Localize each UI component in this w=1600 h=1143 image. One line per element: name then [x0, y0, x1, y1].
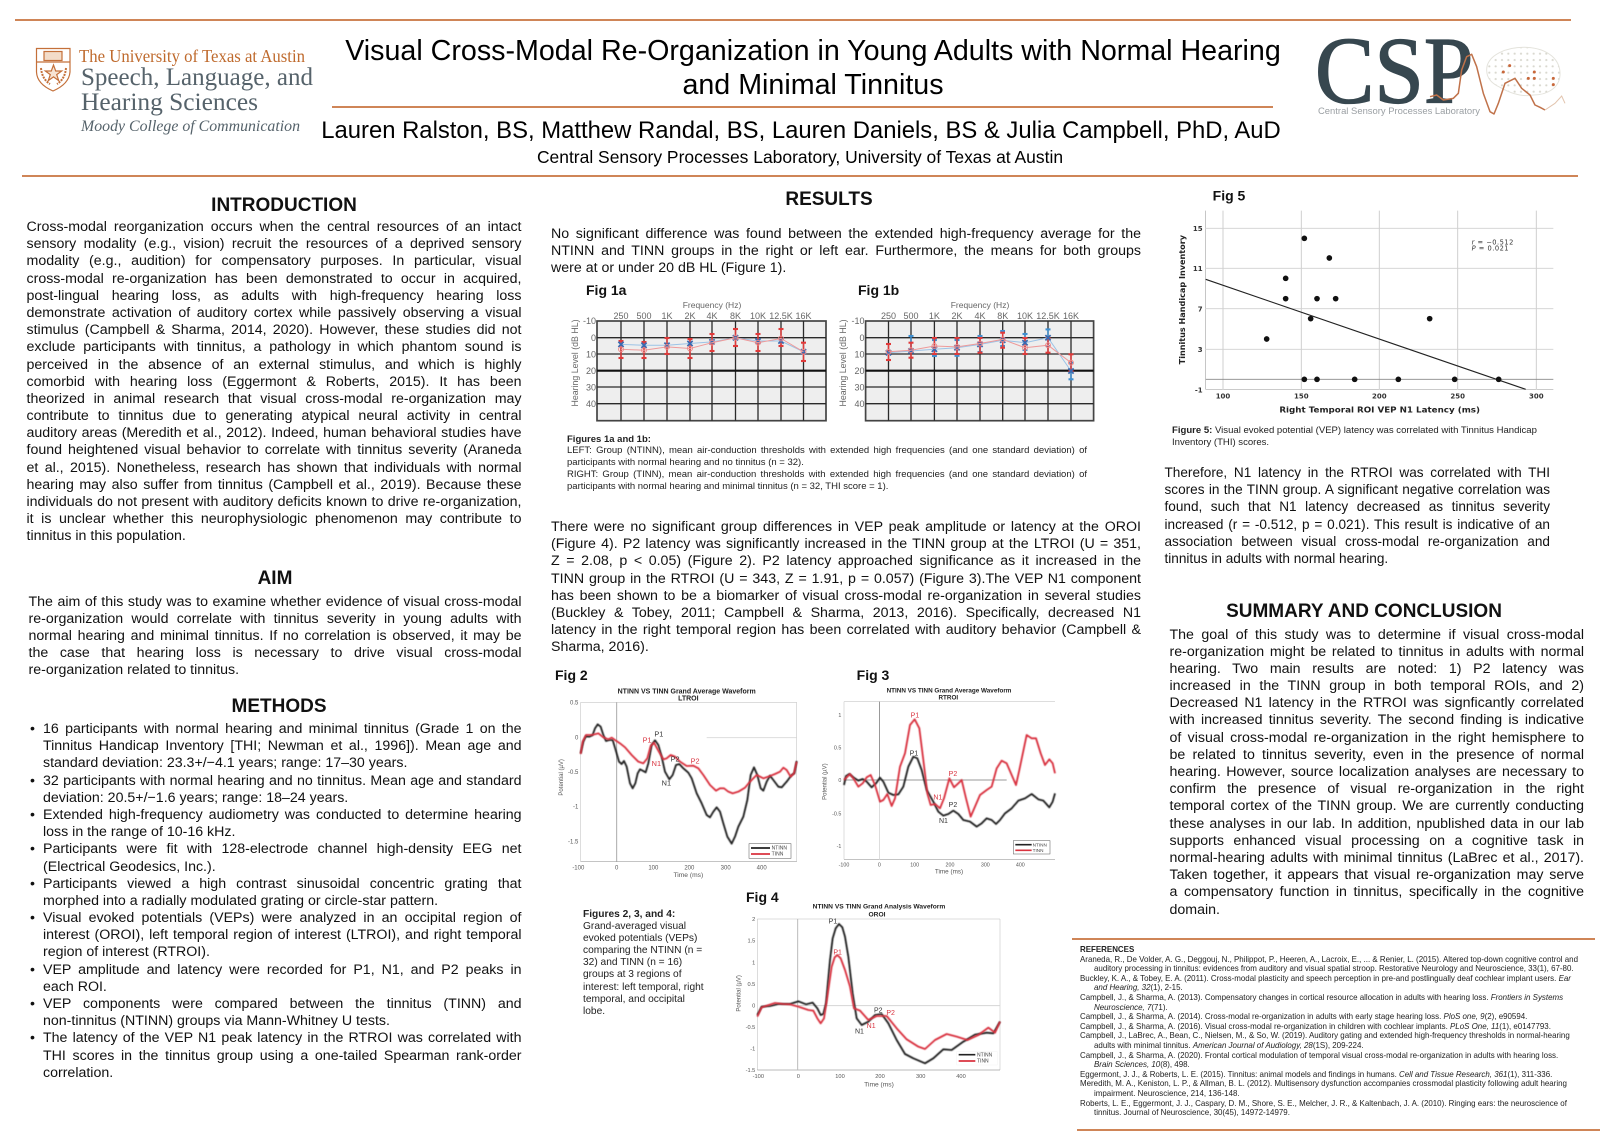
caption: figures 2, 3, and 4: Figures 2, 3, and 4:: [583, 909, 675, 920]
text block: introduction: hearing may also suffer from tinnitus (Campbell et al., 2019). Because these: [26, 477, 522, 493]
chart: Fig 2 LTROI waveform: LTROI: [678, 696, 699, 703]
chart: Fig 3 RTROI waveform: 0: [838, 778, 841, 784]
list: methods: standard deviation: 23.3+/−4.1 years; range: 17–30 years.: [43, 755, 407, 771]
chart: Fig 3 RTROI waveform: Fig 3: [857, 667, 890, 683]
chart: Fig 4 OROI waveform: 1.5: [747, 939, 755, 945]
chart: Fig 5 scatter plot: Fig 5: [1213, 188, 1246, 204]
text: •: [30, 773, 35, 789]
chart: Fig 2 LTROI waveform: Potential (µV): [559, 759, 565, 796]
text block: summary and conclusion: temporal cortex of the TINN group. We are currently conducting: [1170, 798, 1584, 814]
chart: Fig 2 LTROI waveform: TINN: [772, 852, 784, 858]
caption: figures 2, 3, and 4: interest: left temporal, right: [583, 982, 704, 993]
text block: introduction: theorized in animal research that visual cross-modal re-organization may: [26, 391, 522, 407]
chart: Fig 2 LTROI waveform: Fig 2: [555, 667, 588, 683]
caption: figures 1a and 1b: participants with normal hearing and minimal tinnitus (n = 32, THI score = 1).: [567, 481, 888, 492]
references: Campbell, J., & Sharma, A. (2020). Frontal cortical modulation of temporal visual cross-modal re-organization in adults with hearing loss.: [1080, 1051, 1558, 1060]
text block: aim: the case that hearing loss is necessary to drive visual cross-modal: [28, 645, 522, 661]
references: REFERENCES: [1080, 945, 1134, 954]
text block: introduction: stimulus (Campbell & Sharma, 2014, 2020). However, these studies did not: [26, 322, 522, 338]
caption: figures 1a and 1b: Figures 1a and 1b:: [567, 434, 651, 444]
text block: results latency: has been shown to be a biomarker of visual cross-modal re-organization in several studies: [551, 588, 1141, 604]
caption: figures 2, 3, and 4: lobe.: [583, 1006, 605, 1017]
text block: aim: re-organization related to tinnitus.: [28, 662, 239, 678]
caption: figures 2, 3, and 4: 32) and TINN (n = 16): [583, 957, 682, 968]
references bottom rule: [1077, 1129, 1600, 1131]
text block: summary and conclusion: these analyses in our lab. In addition, npublished data in our lab: [1170, 816, 1584, 832]
list: methods: each ROI.: [43, 979, 107, 995]
chart: Fig 3 RTROI waveform: [822, 667, 1056, 876]
chart: Fig 1a audiogram: 30: [586, 382, 596, 392]
list: methods: interest (OROI), left temporal region of interest (LTROI), and right temporal: [43, 927, 522, 943]
list: methods: 32 participants with normal hearing and no tinnitus. Mean age and standard: [43, 773, 522, 789]
chart: Fig 1b audiogram: 10: [854, 350, 864, 360]
chart: Fig 2 LTROI waveform: 0: [575, 735, 579, 741]
chart: Fig 3 RTROI waveform: P1: [911, 712, 919, 719]
text block: summary and conclusion: increased in the TINN group in both temporal ROIs, and 2): [1170, 678, 1584, 694]
chart: Fig 3 RTROI waveform: P2: [949, 771, 957, 778]
references: Meredith, M. A., Keniston, L. P., & Allman, B. L. (2012). Multisensory dysfunction accompanies crossmodal plasticity following adult hearing: [1080, 1079, 1567, 1088]
caption: figures 1a and 1b: RIGHT: Group (TINN), mean air-conduction thresholds with extended high frequencies (and one standard deviation) of: [567, 469, 1087, 480]
list: methods: non-tinnitus (NTINN) groups via Mann-Whitney U tests.: [43, 1013, 390, 1029]
chart: Fig 4 OROI waveform: NTINN VS TINN Grand Analysis Waveform: [813, 904, 945, 911]
heading: aim: AIM: [258, 568, 292, 589]
chart: Fig 4 OROI waveform: 0: [797, 1074, 800, 1080]
text block: correlation result: association between visual cross-modal re-organization and: [1164, 534, 1550, 549]
chart: Fig 4 OROI waveform: N1: [855, 1028, 864, 1035]
chart: Fig 4 OROI waveform: 0.5: [747, 982, 755, 988]
chart: Fig 1a audiogram: 16K: [795, 311, 812, 321]
chart: Fig 1a audiogram: Hearing Level (dB HL): [570, 319, 580, 407]
chart: Fig 1b audiogram: 40: [854, 399, 864, 409]
list: methods: Participants were fit with 128-electrode channel high-density EEG net: [43, 841, 522, 857]
chart: Fig 3 RTROI waveform: 1: [838, 713, 841, 719]
text block: results latency: TINN group in the RTROI (U = 343, Z = 1.91, p = 0.057) (Figure 3).The VEP N1 component: [551, 571, 1141, 587]
text block: summary and conclusion: with increased tinnitus severity. The second finding is indicative: [1170, 712, 1584, 728]
text block: correlation result: found, such that N1 latency decreased as tinnitus severity: [1164, 499, 1550, 514]
chart: Fig 4 OROI waveform: 400: [956, 1074, 966, 1080]
chart: Fig 3 RTROI waveform: Time (ms): [935, 869, 963, 876]
references: Brain Sciences, 10(8), 498.: [1094, 1060, 1190, 1069]
text block: summary and conclusion: re-organization might be related to tinnitus in adults with normal: [1170, 644, 1584, 660]
list: methods: THI scores in the tinnitus group using a one-tailed Spearman rank-order: [43, 1048, 522, 1064]
text block: correlation result: Therefore, N1 latency in the RTROI was correlated with THI: [1164, 465, 1550, 480]
references: adults with minimal tinnitus. American Journal of Audiology, 28(1S), 209-224.: [1094, 1041, 1364, 1050]
logo: University of Texas at Austin: [36, 46, 313, 135]
references: tinnitus. Journal of Neuroscience, 30(45), 14972-14979.: [1094, 1108, 1290, 1117]
list: methods: 16 participants with normal hearing and minimal tinnitus (Grade 1 on the: [43, 721, 522, 737]
references: Eggermont, J. J., & Roberts, L. E. (2015). Tinnitus: animal models and findings in humans. Cell and Tissue Research, 361(1), 311-336.: [1080, 1070, 1552, 1079]
chart: Fig 3 RTROI waveform: P2: [949, 802, 957, 809]
caption: figure 5: Figure 5: Visual evoked potential (VEP) latency was correlated with Tinnitus Handicap: [1172, 425, 1537, 436]
chart: Fig 5 scatter plot: 11: [1193, 265, 1203, 273]
text block: introduction: demonstrate activation of auditory cortex while passively observing a visual: [26, 305, 522, 321]
chart: Fig 4 OROI waveform: 100: [835, 1074, 845, 1080]
text block: summary and conclusion: hearing. Two main results are noted: 1) P2 latency was: [1170, 661, 1584, 677]
chart: Fig 1a audiogram: 40: [586, 399, 596, 409]
chart: Fig 5 scatter plot: 15: [1193, 225, 1203, 233]
header bottom rule: [22, 175, 1578, 177]
chart: Fig 5 scatter plot: 250: [1450, 392, 1465, 400]
list: methods: Tinnitus Handicap Inventory [THI; Newman et al., 1996]). Mean age and: [43, 738, 522, 754]
text: •: [30, 841, 35, 857]
text block: results latency: Sharma, 2016).: [551, 639, 649, 655]
chart: Fig 2 LTROI waveform: NTINN VS TINN Grand Average Waveform: [618, 688, 756, 695]
chart: Fig 2 LTROI waveform: -100: [572, 865, 585, 871]
chart: Fig 1a audiogram: 10: [586, 350, 596, 360]
references: Araneda, R., De Volder, A. G., Deggouj, N., Philippot, P., Heeren, A., Lacroix, E., ... & Renier, L. (2015). Altered top-down cognitive control and: [1080, 955, 1578, 964]
list: methods: Visual evoked potentials (VEPs) were analyzed in an occipital region of: [43, 910, 522, 926]
references: impairment. Neuroscience, 214, 136-148.: [1094, 1089, 1240, 1098]
caption: figure 5: Inventory (THI) scores.: [1172, 437, 1269, 448]
chart: Fig 2 LTROI waveform: 0.5: [570, 700, 579, 706]
text block: results latency: (Figure 4). P2 latency was significantly increased in the TINN group at the LTROI (U = 351,: [551, 536, 1141, 552]
chart: Fig 4 OROI waveform: -100: [753, 1074, 764, 1080]
text block: introduction: perceived in the absence of an external stimulus, and which is highly: [26, 356, 522, 372]
text: •: [30, 876, 35, 892]
chart: Fig 4 OROI waveform: Fig 4: [746, 889, 779, 905]
chart: Fig 2 LTROI waveform: -0.5: [568, 770, 579, 776]
chart: Fig 3 RTROI waveform: -100: [839, 863, 849, 869]
chart: Fig 1b audiogram: 1K: [929, 311, 940, 321]
caption: figures 2, 3, and 4: evoked potentials (VEPs): [583, 933, 697, 944]
chart: Fig 4 OROI waveform: -1.5: [746, 1068, 755, 1074]
text block: summary and conclusion: Decreased N1 latency in the RTROI was signficantly correlated: [1170, 695, 1584, 711]
text block: aim: normal hearing and minimal tinnitus. If no correlation is observed, it may be: [28, 628, 522, 644]
text block: summary and conclusion: domain.: [1170, 902, 1220, 918]
list: methods: (Electrical Geodesics, Inc.).: [43, 858, 216, 874]
affiliation: Central Sensory Processes Laboratory, University of Texas at Austin: [537, 147, 1063, 167]
chart: Fig 5 scatter plot: Right Temporal ROI VEP N1 Latency (ms): [1279, 405, 1480, 415]
caption: figures 2, 3, and 4: temporal, and occipital: [583, 994, 685, 1005]
text block: summary and conclusion: [1170, 626, 1584, 918]
text: •: [30, 962, 35, 978]
chart: Fig 3 RTROI waveform: TINN: [1033, 848, 1044, 853]
references: [1080, 945, 1578, 1117]
chart: Fig 2 LTROI waveform: -1.5: [568, 840, 579, 846]
chart: Fig 2 LTROI waveform: N1: [652, 759, 661, 768]
references: Campbell, J., & Sharma, A. (2014). Cross-modal re-organization in adults with early stage hearing loss. PloS one, 9(2), e90594.: [1080, 1012, 1527, 1021]
chart: Fig 4 OROI waveform: Time (ms): [864, 1081, 894, 1088]
logo: University of Texas at Austin: Moody College of Communication: [80, 118, 300, 135]
chart: Fig 3 RTROI waveform: 100: [910, 863, 919, 869]
chart: Fig 2 LTROI waveform: 300: [721, 865, 731, 871]
text block: aim: [28, 594, 522, 678]
chart: Fig 2 LTROI waveform: P2: [691, 757, 700, 766]
chart: Fig 1a audiogram: Fig 1a: [586, 282, 627, 298]
text block: summary and conclusion: confirm the presence of visual re-organization in the right: [1170, 781, 1584, 797]
chart: Fig 4 OROI waveform: 0: [752, 1004, 755, 1010]
chart: Fig 1a audiogram: -10: [583, 316, 596, 326]
references: Roberts, L. E., Eggermont, J. J., Caspary, D. M., Shore, S. E., Melcher, J. R., & Kaltenbach, J. A. (2010). Ringing ears: the neuroscience of: [1080, 1098, 1567, 1108]
heading: methods: METHODS: [232, 696, 326, 717]
logo: CSP laboratory: [1315, 18, 1566, 124]
chart: Fig 2 LTROI waveform: -1: [573, 805, 579, 811]
chart: Fig 3 RTROI waveform: 200: [946, 863, 954, 869]
icon: UT shield: [36, 48, 70, 91]
heading: results: RESULTS: [785, 189, 873, 210]
chart: Fig 3 RTROI waveform: -0.5: [832, 811, 841, 817]
chart: Fig 5 scatter plot: -1: [1195, 387, 1203, 395]
chart: Fig 3 RTROI waveform: 0: [878, 863, 881, 869]
chart: Fig 1a audiogram: Frequency (Hz): [683, 300, 741, 310]
list: methods: correlation.: [43, 1065, 113, 1081]
chart: Fig 4 OROI waveform: 200: [875, 1074, 885, 1080]
chart: Fig 2 LTROI waveform: 200: [684, 865, 695, 871]
logo: CSP laboratory: Central Sensory Processes Laboratory: [1318, 106, 1481, 116]
references: Campbell, J., & Sharma, A. (2016). Visual cross-modal re-organization in children with cochlear implants. PLoS One, 11(1), e0147793.: [1080, 1022, 1551, 1031]
text block: summary and conclusion: The goal of this study was to determine if visual cross-modal: [1170, 626, 1584, 642]
list: methods: deviation: 20.5+/−1.6 years; range: 18–24 years.: [43, 790, 348, 806]
references: and Hearing, 32(1), 2-15.: [1094, 983, 1183, 992]
list: methods: Participants viewed a high contrast sinusoidal concentric grating that: [43, 876, 522, 892]
chart: Fig 1b audiogram: -10: [851, 316, 864, 326]
heading: introduction: INTRODUCTION: [211, 195, 357, 216]
text: Potential (µV): [823, 763, 829, 800]
text block: aim: re-organization would correlate with tinnitus severity in young adults with: [28, 611, 522, 627]
chart: Fig 3 RTROI waveform: NTINN VS TINN Grand Average Waveform: [887, 687, 1012, 694]
chart: Fig 5 scatter plot: 200: [1372, 392, 1387, 400]
chart: Fig 1b audiogram: [838, 282, 1094, 422]
caption: figures 2, 3, and 4: groups at 3 regions of: [583, 969, 682, 980]
chart: Fig 1b audiogram: Hearing Level (dB HL): [838, 319, 848, 407]
chart: Fig 5 scatter plot: 300: [1529, 392, 1544, 400]
caption: figure 5: [1172, 425, 1537, 448]
text block: correlation result: [1164, 465, 1550, 566]
logo: University of Texas at Austin: Speech, Language, and: [81, 64, 313, 91]
chart: Fig 1a audiogram: 4K: [706, 311, 718, 321]
text block: summary and conclusion: hearing. However, source localization analyses are necessary to: [1170, 764, 1584, 780]
chart: Fig 3 RTROI waveform: NTINN: [1033, 842, 1047, 847]
chart: Fig 4 OROI waveform: -1: [750, 1047, 755, 1053]
text block: introduction: post-lingual hearing loss, as adults with high-frequency hearing loss: [26, 288, 522, 304]
text block: introduction: modality (e.g., audition) for compensatory purposes. In particular, visual: [26, 253, 522, 269]
chart: Fig 5 scatter plot: [1177, 188, 1554, 415]
chart: Fig 4 OROI waveform: 2: [752, 917, 755, 923]
chart: Fig 5 scatter plot: 7: [1198, 305, 1203, 313]
chart: Fig 1b audiogram: Fig 1b: [858, 282, 899, 298]
chart: Fig 3 RTROI waveform: P1: [910, 750, 918, 757]
chart: Fig 5 scatter plot: r = −0.512: [1472, 238, 1514, 246]
chart: Fig 4 OROI waveform: P2: [886, 1010, 895, 1017]
caption: figures 2, 3, and 4: comparing the NTINN (n =: [583, 945, 702, 956]
chart: Fig 1a audiogram: 1K: [661, 311, 673, 321]
text block: introduction: contribute to tinnitus due to generating atypical neural activity in central: [26, 408, 522, 424]
list: methods: The latency of the VEP N1 peak latency in the RTROI was correlated with: [43, 1030, 522, 1046]
chart: Fig 5 scatter plot: Tinnitus Handicap Inventory: [1177, 234, 1187, 364]
text block: correlation result: tinnitus in adults with normal hearing.: [1164, 551, 1388, 566]
chart: Fig 1a audiogram: 8K: [730, 311, 741, 321]
text block: introduction: tinnitus in this population.: [26, 528, 186, 544]
list: methods: VEP components were compared between the tinnitus (TINN) and: [43, 996, 522, 1012]
text block: results intro: No significant difference was found between the extended high-frequency average for the: [551, 226, 1141, 242]
list: methods: VEP amplitude and latency were recorded for P1, N1, and P2 peaks in: [43, 962, 522, 978]
chart: Fig 2 LTROI waveform: P1: [643, 736, 652, 745]
chart: Fig 4 OROI waveform: TINN: [977, 1059, 989, 1065]
title: [345, 35, 1281, 100]
chart: Fig 3 RTROI waveform: 400: [1016, 863, 1025, 869]
text block: summary and conclusion: be related to tinnitus severity, even in the presence of normal: [1170, 747, 1584, 763]
references: Neuroscience, 7(71).: [1094, 1003, 1168, 1012]
chart: Fig 5 scatter plot: 3: [1198, 346, 1203, 354]
text block: introduction: individuals do not present with auditory deficits known to drive re-organization,: [26, 494, 522, 510]
text block: results intro: NTINN and TINN groups in the right or left ear. Furthermore, the means for both groups: [551, 243, 1141, 259]
chart: Fig 3 RTROI waveform: RTROI: [938, 695, 958, 702]
chart: Fig 1b audiogram: 0: [859, 333, 864, 343]
chart: Fig 4 OROI waveform: 300: [916, 1074, 925, 1080]
caption: figures 2, 3, and 4: [583, 909, 704, 1017]
heading: summary and conclusion: SUMMARY AND CONCLUSION: [1226, 601, 1502, 622]
chart: Fig 1b audiogram: 250: [881, 311, 896, 321]
chart: Fig 1a audiogram: 250: [613, 311, 629, 321]
chart: Fig 1a audiogram: 2K: [684, 311, 696, 321]
text block: introduction: exclude participants with tinnitus, a pathology in which phantom sound is: [26, 339, 522, 355]
chart: Fig 2 LTROI waveform: 400: [757, 865, 767, 871]
list: methods: Extended high-frequency audiometry was conducted to determine hearing: [43, 807, 522, 823]
chart: Fig 5 scatter plot: 150: [1294, 392, 1309, 400]
chart: Fig 5 scatter plot: P = 0.021: [1472, 245, 1509, 253]
text block: introduction: found heightened visual behavior to correlate with tinnitus severity (Araneda: [26, 442, 522, 458]
text: •: [30, 807, 35, 823]
text: •: [30, 1030, 35, 1046]
chart: Fig 3 RTROI waveform: 300: [981, 863, 990, 869]
chart: Fig 2 LTROI waveform: 100: [648, 865, 659, 871]
list: methods: region of interest (RTROI).: [43, 944, 210, 960]
title underline rule: [332, 106, 1273, 108]
list: methods: loss in the range of 10-16 kHz.: [43, 824, 235, 840]
references: Campbell, J., & Sharma, A. (2013). Compensatory changes in cortical resource allocation in adults with hearing loss. Frontiers in Systems: [1080, 993, 1563, 1002]
list: methods: morphed into a radially modulated grating or circle-star pattern.: [43, 893, 438, 909]
chart: Fig 1a audiogram: 10K: [750, 311, 766, 321]
chart: Fig 1b audiogram: 16K: [1063, 311, 1079, 321]
text block: summary and conclusion: supports enhanced visual processing on a cognitive task in: [1170, 833, 1584, 849]
chart: Fig 2 LTROI waveform: NTINN: [772, 846, 787, 852]
chart: Fig 1b audiogram: 20: [854, 366, 864, 376]
caption: figures 1a and 1b: [567, 434, 1088, 492]
chart: Fig 4 OROI waveform: P1: [829, 919, 837, 926]
chart: Fig 1b audiogram: 8K: [997, 311, 1008, 321]
chart: Fig 1b audiogram: Frequency (Hz): [951, 300, 1009, 310]
logo: University of Texas at Austin: The University of Texas at Austin: [79, 46, 305, 66]
title: and Minimal Tinnitus: [682, 68, 944, 100]
chart: Fig 4 OROI waveform: Potential (µV): [737, 975, 743, 1012]
text block: introduction: sensory modality (e.g., vision) recruit the resources of a deprived sensory: [26, 236, 522, 252]
text block: results latency: (Buckley & Tobey, 2011; Campbell & Sharma, 2013, 2016). Specifically, decreased N1: [551, 605, 1141, 621]
chart: Fig 1b audiogram: 30: [854, 382, 864, 392]
text block: summary and conclusion: Taken together, it appears that visual re-organization may serve: [1170, 867, 1584, 883]
chart: Fig 1b audiogram: 10K: [1017, 311, 1033, 321]
chart: Fig 2 LTROI waveform: P1: [654, 730, 663, 739]
text block: introduction: it is unclear whether this neurophysiologic phenomenon may contribute to: [26, 511, 522, 527]
chart: Fig 2 LTROI waveform: Time (ms): [673, 872, 703, 879]
chart: Fig 1a audiogram: 20: [586, 366, 596, 376]
caption: figures 2, 3, and 4: Grand-averaged visual: [583, 921, 686, 932]
chart: Fig 4 OROI waveform: P2: [874, 1007, 883, 1014]
chart: Fig 3 RTROI waveform: N1: [939, 818, 948, 825]
text block: introduction: comorbid with hearing loss (Eggermont & Roberts, 2015). It has been: [26, 374, 522, 390]
text block: results latency: There were no significant group differences in VEP peak amplitude or latency at the OROI: [551, 519, 1141, 535]
chart: Fig 4 OROI waveform: P1: [833, 949, 842, 956]
text block: summary and conclusion: normal-hearing adults with minimal tinnitus (LaBrec et al., 2017).: [1170, 850, 1584, 866]
logo: University of Texas at Austin: Hearing Sciences: [81, 89, 258, 116]
chart: Fig 1a audiogram: [570, 282, 827, 422]
text block: introduction: et al., 2015). Nonetheless, research has shown that individuals with normal: [26, 460, 522, 476]
text block: results intro: [551, 226, 1141, 276]
chart: Fig 1b audiogram: 2K: [951, 311, 963, 321]
text block: correlation result: scores in the TINN group. A significant negative correlation was: [1164, 482, 1550, 497]
caption: figures 1a and 1b: participants with normal hearing and no tinnitus (n = 32).: [567, 457, 804, 468]
chart: Fig 4 OROI waveform: [736, 889, 1002, 1088]
references: Buckley, K. A., & Tobey, E. A. (2011). Cross-modal plasticity and speech perception in pre-and postlingually deaf cochlear implant users. Ear: [1080, 974, 1571, 983]
chart: Fig 2 LTROI waveform: P2: [671, 754, 680, 763]
chart: Fig 2 LTROI waveform: N1: [662, 779, 671, 788]
caption: figures 1a and 1b: LEFT: Group (NTINN), mean air-conduction thresholds with extended high frequencies (and one standard deviation) of: [567, 445, 1087, 456]
text block: correlation result: increased (r = -0.512, p = 0.021). This result is indicative of an: [1164, 517, 1550, 532]
chart: Fig 1b audiogram: 12.5K: [1036, 311, 1060, 321]
chart: Fig 4 OROI waveform: NTINN: [977, 1052, 993, 1058]
chart: Fig 4 OROI waveform: OROI: [868, 911, 886, 918]
header top rule: [15, 19, 1571, 21]
chart: Fig 1b audiogram: 500: [903, 311, 919, 321]
title: Visual Cross-Modal Re-Organization in Young Adults with Normal Hearing: [345, 35, 1281, 67]
chart: Fig 2 LTROI waveform: [555, 667, 798, 879]
text block: introduction: cross-modal re-organization has been demonstrated to occur in acquired,: [26, 271, 522, 287]
chart: Fig 1a audiogram: 500: [636, 311, 652, 321]
text block: aim: The aim of this study was to examine whether evidence of visual cross-modal: [28, 594, 522, 610]
text: •: [30, 910, 35, 926]
references: Campbell, J., LaBrec, A., Bean, C., Nielsen, M., & So, W. (2019). Auditory gating and extended high-frequency thresholds in normal-hearing: [1080, 1031, 1570, 1040]
text block: results latency: latency in the right temporal region has been correlated with auditory behavior (Campbell &: [551, 622, 1141, 638]
text block: results intro: were at or under 20 dB HL (Figure 1).: [551, 260, 786, 276]
text block: introduction: Cross-modal reorganization occurs when the central resources of an intact: [26, 219, 522, 235]
chart: Fig 3 RTROI waveform: N1: [933, 794, 942, 801]
chart: Fig 5 scatter plot: 100: [1216, 392, 1230, 400]
chart: Fig 2 LTROI waveform: 0: [615, 865, 619, 871]
chart: Fig 4 OROI waveform: 1: [752, 960, 755, 966]
references top rule: [1072, 938, 1595, 940]
chart: Fig 3 RTROI waveform: 0.5: [834, 745, 841, 751]
chart: Fig 4 OROI waveform: N1: [867, 1023, 876, 1030]
text block: introduction: auditory areas (Meredith et al., 2012). Indeed, human behavioral studies have: [26, 425, 522, 441]
list: methods: [30, 721, 522, 1081]
text: •: [30, 721, 35, 737]
chart: Fig 3 RTROI waveform: -1: [837, 844, 841, 850]
text block: results latency: Z = 2.08, p < 0.05) (Figure 2). P2 latency approached significance as it increased in the: [551, 553, 1141, 569]
text block: summary and conclusion: a compensatory function in tinnitus, specifically in the cognitive: [1170, 884, 1584, 900]
text block: summary and conclusion: of visual cross-modal re-organization in the right hemisphere to: [1170, 730, 1584, 746]
chart: Fig 1b audiogram: 4K: [974, 311, 986, 321]
references: auditory processing in tinnitus: evidences from auditory and visual spatial stroop. Restorative Neurology and Neuroscience, 33(1), 67-80.: [1094, 964, 1574, 973]
text: •: [30, 996, 35, 1012]
logo: CSP laboratory: CSP: [1315, 18, 1473, 124]
text block: results latency: [551, 519, 1141, 655]
chart: Fig 1a audiogram: 12.5K: [769, 311, 793, 321]
chart: Fig 1a audiogram: 0: [591, 333, 596, 343]
chart: Fig 4 OROI waveform: -0.5: [746, 1025, 755, 1031]
authors: Lauren Ralston, BS, Matthew Randal, BS, Lauren Daniels, BS & Julia Campbell, PhD, AuD: [321, 117, 1281, 144]
text block: introduction: [26, 219, 522, 544]
